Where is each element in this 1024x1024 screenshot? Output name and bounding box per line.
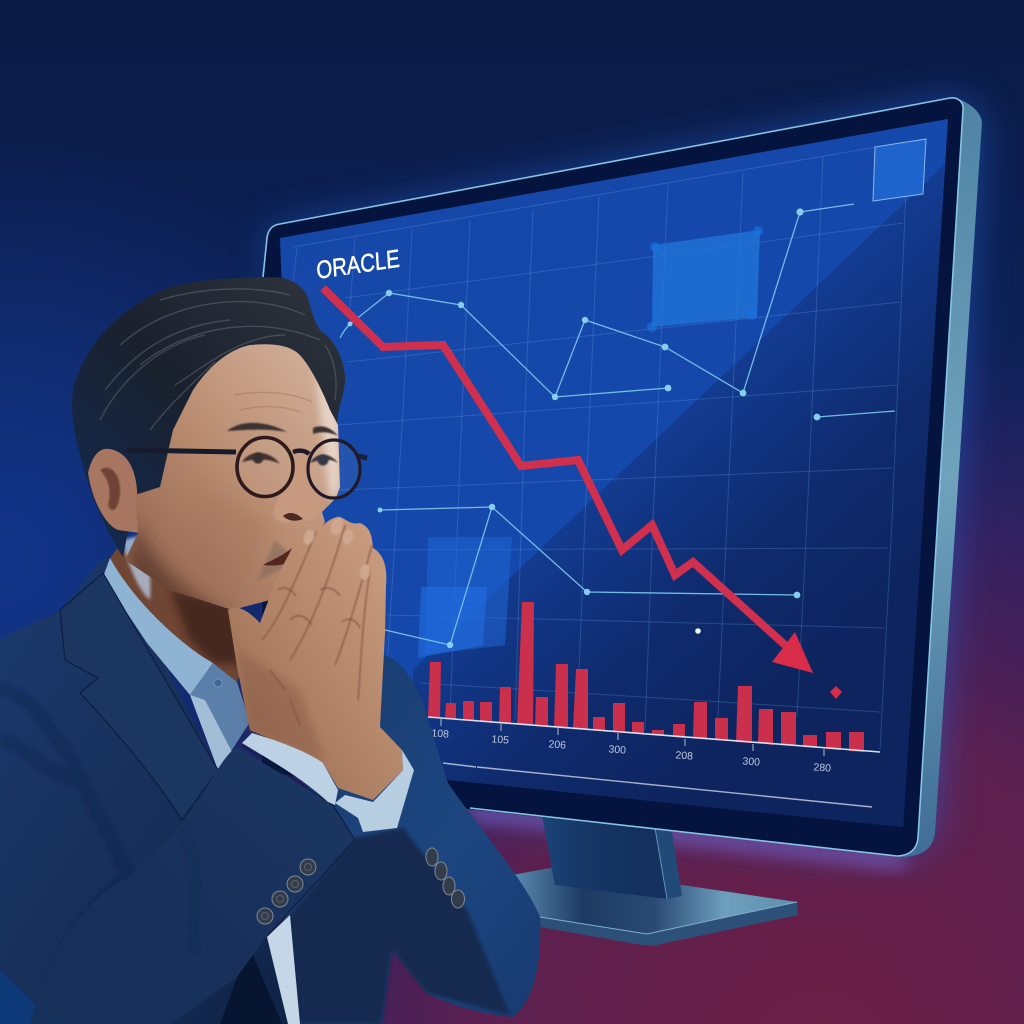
left cuff	[242, 733, 338, 805]
bar chart axis labels: 208	[675, 749, 694, 763]
monitor frame	[262, 98, 982, 857]
near sleeve	[30, 745, 355, 1024]
monitor bezel	[262, 98, 963, 856]
top right square	[873, 139, 926, 201]
hand shading	[238, 650, 325, 762]
shirt	[103, 558, 300, 1024]
face	[125, 344, 340, 610]
glasses	[127, 438, 367, 498]
jacket blue edge sliver	[0, 970, 55, 1024]
left panels	[418, 537, 512, 658]
sleeve buttons right	[426, 848, 464, 908]
lower shirt strip	[267, 915, 300, 1024]
jacket body	[0, 558, 300, 1024]
nose	[273, 455, 320, 522]
ORACLE logo text: ORACLE	[316, 245, 400, 285]
mouth	[263, 548, 292, 566]
monitor glow	[265, 98, 982, 862]
ear	[88, 449, 139, 533]
far arm	[270, 655, 540, 1024]
fingernails	[302, 516, 372, 581]
shirt placket	[190, 663, 250, 770]
bar chart axis labels: 108	[431, 727, 450, 741]
falling red line arrow	[323, 288, 813, 673]
eyes	[242, 452, 338, 466]
bar chart axis labels	[432, 729, 831, 772]
center panel	[647, 226, 763, 332]
hands	[228, 516, 403, 800]
red diamond	[830, 686, 842, 699]
bar chart axis	[428, 717, 880, 807]
jacket dark wedge	[220, 955, 282, 1024]
screen bright area	[280, 119, 948, 827]
hair strands highlights	[100, 289, 336, 430]
bar chart	[428, 602, 864, 752]
right cuff	[335, 750, 414, 832]
line chart network	[340, 204, 895, 648]
stand neck	[542, 815, 682, 899]
shoulder and arm folds	[0, 687, 130, 985]
monitor side edge	[900, 98, 982, 857]
hair	[72, 277, 345, 557]
lapel	[60, 573, 218, 820]
man	[0, 277, 540, 1024]
white dot	[695, 628, 701, 634]
face shading	[125, 376, 340, 608]
screen dark diagonal area	[413, 150, 960, 860]
bar chart axis labels: 206	[548, 738, 567, 752]
collar	[103, 558, 213, 695]
collar button	[214, 679, 222, 687]
monitor stand	[512, 815, 798, 946]
finger lines	[262, 525, 372, 725]
grid lines	[293, 142, 908, 750]
neck	[110, 535, 245, 695]
neck blue rim light	[122, 535, 151, 600]
stand base	[512, 868, 798, 946]
translucent blue panels	[418, 139, 926, 658]
sleeve buttons left	[257, 859, 316, 924]
bar chart axis labels: 280	[813, 761, 832, 775]
bar chart axis labels: 300	[742, 755, 761, 769]
bar chart axis labels: 300	[608, 743, 627, 757]
dark under-arm shadow	[285, 828, 510, 1024]
monitor screen	[280, 119, 948, 827]
bar chart axis labels: 105	[491, 733, 510, 747]
eyebrows	[227, 423, 338, 436]
